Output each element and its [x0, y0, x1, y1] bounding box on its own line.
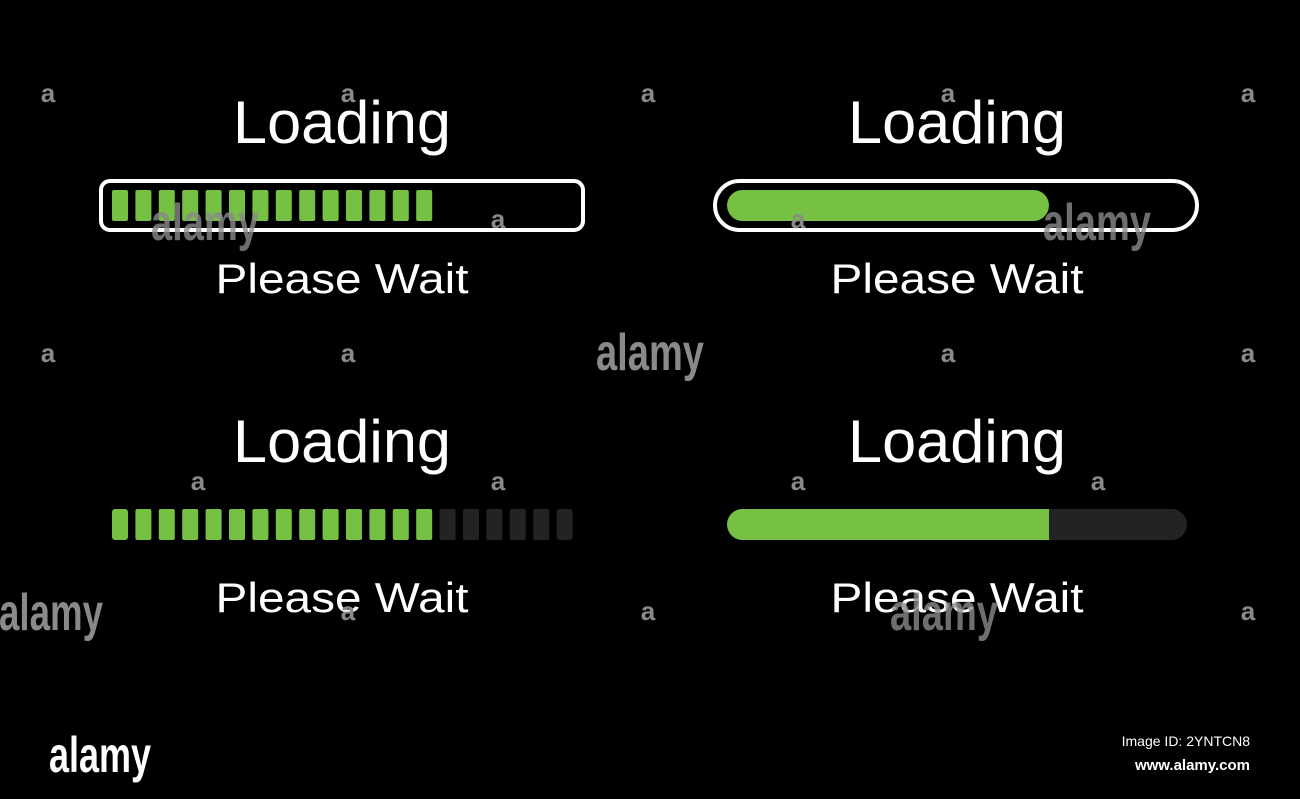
watermarks: alamy: [890, 584, 998, 642]
heading: loading 1: Loading: [233, 89, 451, 156]
caption: please wait 2: Please Wait: [830, 255, 1084, 302]
watermarks: alamy: [596, 324, 704, 382]
watermarks: a: [791, 204, 806, 234]
panel: pill bar in frame: [715, 89, 1197, 302]
watermarks: a: [41, 78, 56, 108]
heading: loading 4: Loading: [848, 408, 1066, 475]
watermarks: a: [941, 78, 956, 108]
progress bar 4: [727, 509, 1187, 540]
watermarks: a: [641, 78, 656, 108]
progress bar 3: [112, 509, 573, 540]
watermarks: a: [341, 78, 356, 108]
footer image id: www.alamy.com: [1134, 757, 1250, 774]
watermarks: a: [1091, 466, 1106, 496]
progress bar 2: [715, 181, 1197, 230]
watermarks: a: [941, 338, 956, 368]
watermarks: a: [641, 596, 656, 626]
caption: please wait 3: Please Wait: [216, 574, 469, 621]
panel: segmented bar with track: [112, 408, 573, 621]
panel: pill bar with track: [727, 408, 1187, 621]
footer image id: Image ID: 2YNTCN8: [1122, 733, 1250, 749]
watermarks: alamy: [1043, 194, 1151, 252]
watermarks: a: [491, 204, 506, 234]
caption: please wait 4: Please Wait: [830, 574, 1084, 621]
watermarks: alamy: [0, 584, 103, 642]
heading: loading 2: Loading: [848, 89, 1066, 156]
watermarks: a: [1241, 78, 1256, 108]
watermarks: [0, 78, 1256, 642]
watermarks: a: [1241, 338, 1256, 368]
watermarks: a: [1241, 596, 1256, 626]
watermarks: a: [41, 338, 56, 368]
watermarks: a: [341, 338, 356, 368]
heading: loading 3: Loading: [233, 408, 451, 475]
footer image id: [1122, 733, 1250, 774]
watermarks: a: [491, 466, 506, 496]
watermarks: a: [791, 466, 806, 496]
watermarks: a: [191, 466, 206, 496]
watermarks: alamy: [151, 194, 259, 252]
panel: segmented bar in frame: [101, 89, 583, 302]
caption: please wait 1: Please Wait: [216, 255, 469, 302]
progress bar 1: [101, 181, 583, 230]
footer logo: alamy: [49, 727, 151, 783]
watermarks: a: [341, 596, 356, 626]
